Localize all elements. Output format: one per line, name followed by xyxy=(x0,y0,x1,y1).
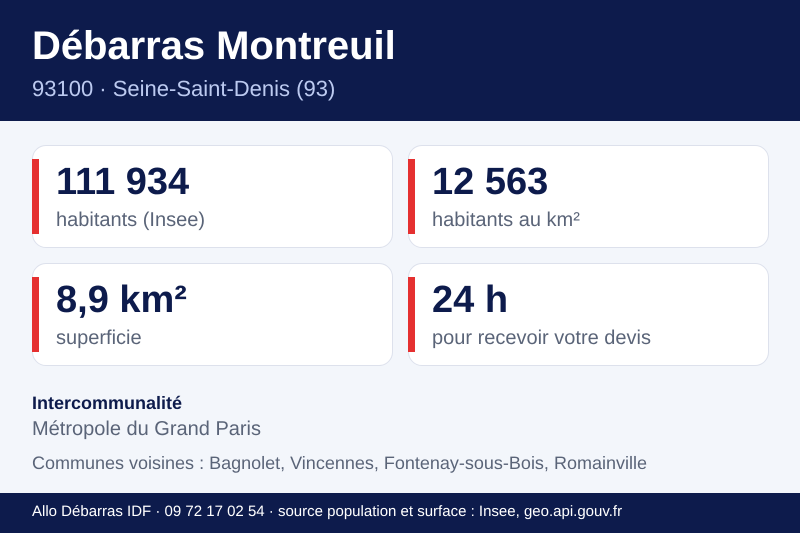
footer text: Allo Débarras IDF · 09 72 17 02 54 · source population et surface : Insee, geo.api.gouv.fr xyxy=(32,503,622,520)
accent bar xyxy=(32,277,39,352)
area label: superficie xyxy=(56,327,142,349)
header band xyxy=(0,0,800,121)
footer band xyxy=(0,493,800,533)
stat card: area xyxy=(32,263,393,366)
accent bar xyxy=(32,159,39,234)
stat card: population xyxy=(32,145,393,248)
population value: 111 934 xyxy=(56,161,189,203)
stat card: density xyxy=(408,145,769,248)
neighbouring towns: Communes voisines : Bagnolet, Vincennes, Fontenay-sous-Bois, Romainville xyxy=(32,453,647,473)
density value: 12 563 xyxy=(432,161,548,203)
subtitle: 93100 · Seine-Saint-Denis (93) xyxy=(32,76,335,101)
delay value: 24 h xyxy=(432,279,508,321)
title: Débarras Montreuil xyxy=(32,24,396,68)
stat card: quote delay xyxy=(408,263,769,366)
density label: habitants au km² xyxy=(432,209,580,231)
intercommunality heading: Intercommunalité xyxy=(32,393,182,413)
accent bar xyxy=(408,277,415,352)
population label: habitants (Insee) xyxy=(56,209,205,231)
delay label: pour recevoir votre devis xyxy=(432,327,651,349)
accent bar xyxy=(408,159,415,234)
area value: 8,9 km² xyxy=(56,279,187,321)
intercommunality name: Métropole du Grand Paris xyxy=(32,418,261,440)
